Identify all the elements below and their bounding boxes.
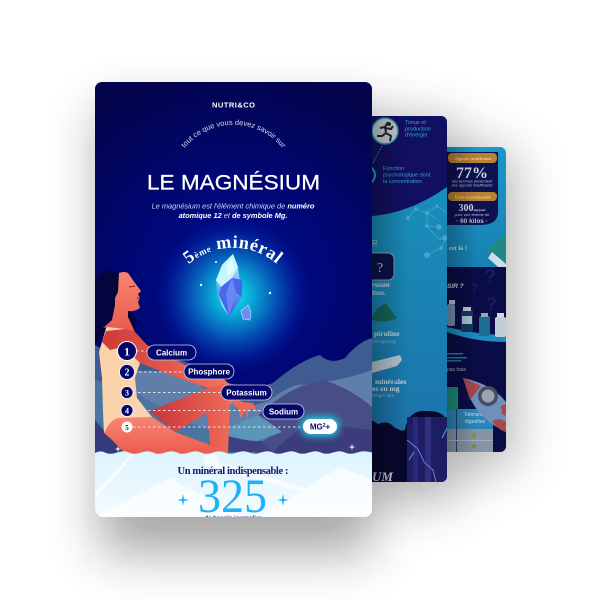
icon: check xyxy=(472,433,476,438)
text: mineral waters xyxy=(372,379,406,398)
title: LE MAGNÉSIUM xyxy=(147,172,320,194)
label: recommended dose: Dose recommandée xyxy=(455,194,491,200)
neck and face xyxy=(103,272,141,332)
caption: 60 kilos: · 60 kilos · xyxy=(456,218,488,225)
clipped caption: de besoin journalier xyxy=(204,516,262,522)
text: est là: est là ! xyxy=(449,245,467,252)
text: mineral waters: minérales xyxy=(375,377,406,386)
icon: runner xyxy=(372,118,398,144)
text: spirulina xyxy=(372,331,400,344)
item: Potassium: Potassium xyxy=(226,388,267,398)
stat: 325: 325 xyxy=(198,470,267,523)
text: tonus: production xyxy=(405,126,431,132)
stat: 77%: 77% xyxy=(456,165,488,182)
text: tonus: d'énergie xyxy=(405,132,427,138)
text: magnesium: rsium xyxy=(372,282,390,289)
icon: question marks: ? xyxy=(486,294,497,314)
hand xyxy=(230,397,258,420)
panel: ice footer xyxy=(95,451,372,523)
panel: stats xyxy=(447,152,498,225)
icon: brush xyxy=(486,233,506,267)
item: Calcium xyxy=(118,342,196,360)
letter fragment: R xyxy=(372,239,378,248)
caption: 77%: des femmes présentent xyxy=(452,178,493,184)
item: MG2+: + xyxy=(326,422,330,432)
item: MG2+ xyxy=(122,417,339,436)
item: Sodium: Sodium xyxy=(269,408,298,416)
heading: essential mineral: Un minéral indispensable : xyxy=(178,466,288,477)
item: MG2+: 2 xyxy=(323,423,326,429)
header: digestive tolerance: digestive xyxy=(465,419,485,425)
caption: pas tous: pas tous xyxy=(447,367,466,373)
item: Phosphore: Phosphore xyxy=(188,368,230,376)
molecule network xyxy=(406,205,448,258)
icon: water bottle xyxy=(372,355,402,373)
icon: question marks: ? xyxy=(470,280,479,296)
stat: 300 mg: 300mg/jour xyxy=(458,203,486,214)
table: comparison xyxy=(447,387,493,452)
logo: NUTRI&CO xyxy=(212,100,255,110)
sparkle xyxy=(348,444,356,450)
hair xyxy=(93,271,136,346)
text: function: Fonction xyxy=(383,166,404,172)
item: Phosphore xyxy=(120,364,234,380)
panel: supplements xyxy=(447,267,506,452)
shoulder and arm xyxy=(102,329,240,404)
fragment: UM: UM xyxy=(372,469,393,484)
torso xyxy=(99,325,152,433)
purple lightning sky xyxy=(407,417,447,482)
item: Potassium: 3 xyxy=(125,388,129,398)
text: magnesium: tion. xyxy=(372,290,386,297)
lower leg xyxy=(104,417,228,456)
mountains xyxy=(95,338,372,460)
icon: spirulina xyxy=(372,303,397,322)
question box: ? xyxy=(377,261,383,276)
dark clouds xyxy=(372,411,447,482)
text: function: la concentration xyxy=(383,179,422,185)
icon: crystal xyxy=(216,254,242,316)
panel: back card xyxy=(447,147,506,452)
crystal glow xyxy=(155,217,311,373)
panel: front card xyxy=(95,82,372,517)
drop shadows xyxy=(100,108,515,553)
illustration: woman xyxy=(93,271,258,456)
text: mineral waters: 0mg/1 litre xyxy=(372,393,395,399)
text: tonus: Tonus et xyxy=(405,120,426,126)
item: Phosphore: 2 xyxy=(124,368,130,378)
icon: circle xyxy=(372,167,376,183)
heading: choose: SIR ? xyxy=(447,283,464,290)
ice cracks xyxy=(95,454,372,517)
icon: check xyxy=(472,444,476,448)
header: digestive tolerance: Tolérance xyxy=(464,412,486,418)
item: Sodium xyxy=(121,404,304,419)
text lines xyxy=(447,353,467,362)
bottles xyxy=(447,300,506,337)
icon: question marks: ? xyxy=(484,266,496,288)
intro text: Le magnésium est l'élément chimique de numéro xyxy=(152,202,314,210)
caption: 60 kilos: pour une femme de xyxy=(455,212,490,217)
question box xyxy=(372,252,394,280)
closed eye and lips xyxy=(129,286,140,298)
blue shelf xyxy=(447,327,506,342)
dashed connector lines xyxy=(133,351,303,427)
panel: middle card xyxy=(372,116,447,482)
caption: 77%: des apports insuffisants xyxy=(452,182,492,188)
star xyxy=(277,494,289,506)
sparkles xyxy=(200,261,271,294)
text: function: psychologique dont xyxy=(383,172,431,178)
label: insufficient intake: Apports insuffisants xyxy=(454,156,492,161)
curved label: 5ème minéral: 5ème minéral xyxy=(182,235,284,264)
star xyxy=(177,494,189,506)
item: Sodium: 4 xyxy=(125,406,129,416)
raised thigh and shin xyxy=(150,384,230,453)
text: spirulina: 00mg/100g xyxy=(372,339,396,345)
navy header xyxy=(372,116,447,216)
intro text: atomique 12 et de symbole Mg. xyxy=(179,211,287,220)
icon: small crystal xyxy=(241,305,251,320)
item: Calcium: Calcium xyxy=(156,348,187,358)
list: minerals xyxy=(118,342,339,436)
curved subtitle: tout ce que vous devez savoir sur xyxy=(182,120,286,148)
dotted connector xyxy=(373,146,382,163)
icon: rocket xyxy=(463,378,506,432)
item: MG2+: MG xyxy=(310,422,323,432)
text: mineral waters: es en mg xyxy=(372,384,400,393)
item: Calcium: 1 xyxy=(124,344,130,358)
text: spirulina: piruline xyxy=(374,329,400,338)
item: MG2+: 5 xyxy=(125,424,129,432)
sparkle xyxy=(114,446,122,452)
item: Potassium xyxy=(121,385,272,400)
